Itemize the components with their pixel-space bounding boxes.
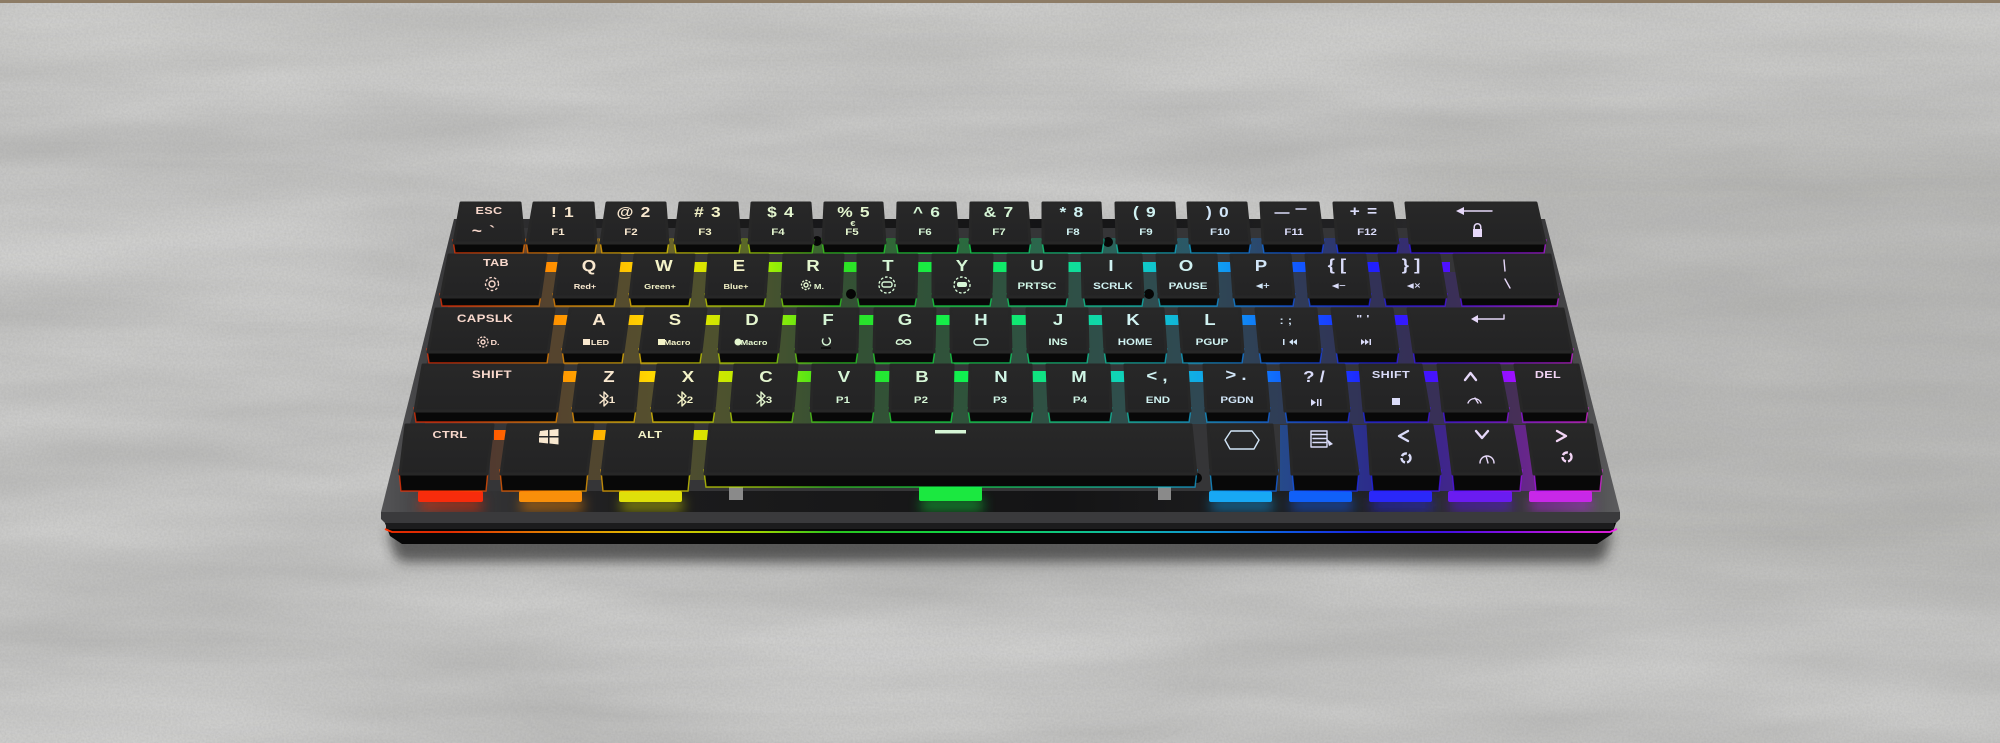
key K: HOME xyxy=(1118,337,1152,348)
key 7 xyxy=(969,203,1031,253)
key slash xyxy=(1281,365,1350,422)
key L xyxy=(1179,309,1244,363)
key G: G xyxy=(898,311,912,329)
key Z: 1 xyxy=(609,395,615,406)
key E: E xyxy=(733,257,745,275)
key right bracket: } ] xyxy=(1402,256,1420,274)
key E xyxy=(705,255,768,306)
key E: Blue+ xyxy=(723,282,749,291)
key P xyxy=(1231,255,1295,306)
key U xyxy=(1007,255,1068,306)
key H: H xyxy=(974,311,988,329)
key 2: @ 2 xyxy=(616,205,652,221)
key 5 xyxy=(822,203,886,253)
key left SHIFT xyxy=(414,365,563,422)
key left arrow xyxy=(1368,425,1441,491)
key period: PGDN xyxy=(1220,395,1254,406)
key U: PRTSC xyxy=(1017,281,1057,292)
key 2: F2 xyxy=(624,227,638,238)
keyboard front edge with LED strip xyxy=(381,512,1620,544)
key right bracket xyxy=(1379,255,1447,306)
key X xyxy=(651,365,718,422)
key ALT: ALT xyxy=(638,430,662,441)
key 9: ( 9 xyxy=(1133,205,1157,221)
keys: row 5 xyxy=(399,425,1602,491)
key D: Macro xyxy=(741,338,767,347)
key Z xyxy=(572,365,639,422)
key 4 xyxy=(748,203,814,253)
key 9: F9 xyxy=(1139,227,1153,238)
key Q: Q xyxy=(582,257,596,275)
key Z: Z xyxy=(603,368,615,386)
key I: SCRLK xyxy=(1093,281,1133,292)
key 3 xyxy=(674,203,741,253)
key 6: F6 xyxy=(918,227,932,238)
key Y: Y xyxy=(956,257,969,275)
key L: PGUP xyxy=(1196,337,1228,348)
key O xyxy=(1157,255,1219,306)
key L: L xyxy=(1204,311,1216,329)
key Y xyxy=(932,255,992,306)
key 0: F10 xyxy=(1210,227,1230,238)
key comma: < , xyxy=(1146,367,1168,385)
key right SHIFT xyxy=(1360,365,1430,422)
key comma xyxy=(1125,365,1191,422)
key P: P xyxy=(1255,257,1267,275)
key N xyxy=(968,365,1033,422)
key enter xyxy=(1408,309,1573,363)
key minus: F11 xyxy=(1284,227,1304,238)
keys: row 2 xyxy=(440,255,1559,306)
key quote xyxy=(1332,309,1399,363)
key down arrow xyxy=(1447,425,1522,491)
key O: PAUSE xyxy=(1169,281,1207,292)
key period xyxy=(1204,365,1270,422)
key 7: & 7 xyxy=(984,205,1014,221)
key CAPSLK: CAPSLK xyxy=(457,312,513,325)
key R xyxy=(781,255,843,306)
key up xyxy=(1438,365,1509,422)
key A: LED xyxy=(591,338,609,347)
key K xyxy=(1103,309,1167,363)
key menu xyxy=(1289,425,1359,491)
key D: D xyxy=(745,311,759,329)
key A xyxy=(562,309,629,363)
key ALT xyxy=(601,425,693,491)
key 1: F1 xyxy=(551,227,565,238)
key DEL xyxy=(1515,365,1588,422)
key X: X xyxy=(682,368,695,386)
key D xyxy=(718,309,782,363)
key DEL: DEL xyxy=(1535,370,1561,381)
key 4: F4 xyxy=(771,227,785,238)
key 5: € xyxy=(850,219,856,228)
key Cooler Master logo xyxy=(1208,425,1278,491)
key semicolon: : ; xyxy=(1280,316,1292,327)
keys: row 4 xyxy=(414,365,1588,422)
key 6 xyxy=(896,203,959,253)
key V: V xyxy=(838,368,851,386)
key equals xyxy=(1334,203,1399,253)
key P: ◀+ xyxy=(1256,281,1270,290)
key TAB: TAB xyxy=(483,258,509,269)
key M xyxy=(1047,365,1112,422)
key CTRL: CTRL xyxy=(433,430,467,441)
key quote: " ' xyxy=(1356,314,1370,325)
key left bracket xyxy=(1306,255,1371,306)
key 6: ^ 6 xyxy=(913,205,941,221)
key K: K xyxy=(1126,311,1140,329)
key 9 xyxy=(1116,203,1177,253)
key S: S xyxy=(669,311,681,329)
key H xyxy=(950,309,1012,363)
key right SHIFT: SHIFT xyxy=(1372,370,1410,381)
key J: INS xyxy=(1048,337,1068,348)
key comma: END xyxy=(1146,395,1170,406)
key 0 xyxy=(1188,203,1251,253)
key C: C xyxy=(759,368,773,386)
key X: 2 xyxy=(687,395,693,406)
keys: row 3 xyxy=(427,309,1573,363)
key space bar xyxy=(704,425,1197,487)
key backspace xyxy=(1406,203,1546,253)
key T xyxy=(857,255,917,306)
key ESC: ESC xyxy=(475,206,503,217)
key 1: ! 1 xyxy=(551,205,575,221)
key 8 xyxy=(1042,203,1104,253)
key F xyxy=(795,309,858,363)
space bar stabilisers xyxy=(729,487,1171,500)
key B: P2 xyxy=(914,395,928,406)
key slash: ? / xyxy=(1303,368,1325,386)
rainbow underglow xyxy=(425,238,1585,491)
key T: T xyxy=(882,257,894,275)
key Windows xyxy=(500,425,593,491)
key right arrow xyxy=(1527,425,1602,491)
key 2 xyxy=(600,203,669,253)
key 5: F5 xyxy=(845,227,859,238)
key equals: F12 xyxy=(1357,227,1377,238)
key V: P1 xyxy=(836,395,850,406)
key 8: * 8 xyxy=(1060,205,1084,221)
key CAPSLK xyxy=(427,309,554,363)
key R: M. xyxy=(814,282,824,291)
key B xyxy=(889,365,953,422)
key N: P3 xyxy=(993,395,1007,406)
key Q xyxy=(553,255,620,306)
key left SHIFT: SHIFT xyxy=(472,368,512,381)
keys: row 1 xyxy=(453,203,1546,253)
key O: O xyxy=(1179,257,1193,275)
key 5: % 5 xyxy=(837,205,871,221)
key 3: F3 xyxy=(698,227,712,238)
key semicolon xyxy=(1256,309,1322,363)
key W xyxy=(629,255,694,306)
key V xyxy=(810,365,874,422)
key I xyxy=(1082,255,1144,306)
key CAPSLK: D. xyxy=(490,338,500,347)
key equals: + = xyxy=(1350,204,1378,220)
key 4: $ 4 xyxy=(767,205,795,221)
key I: I xyxy=(1108,257,1114,275)
key U: U xyxy=(1030,257,1044,275)
key B: B xyxy=(915,368,929,386)
key A: A xyxy=(592,311,606,329)
key minus xyxy=(1261,203,1324,253)
key C xyxy=(730,365,797,422)
key 1 xyxy=(526,203,597,253)
key backslash xyxy=(1454,255,1559,306)
key J: J xyxy=(1053,311,1063,329)
key period: > . xyxy=(1225,366,1247,384)
key W: Green+ xyxy=(644,282,676,291)
key J xyxy=(1027,309,1089,363)
key ESC: ~ ` xyxy=(472,224,496,240)
key left bracket: { [ xyxy=(1328,256,1347,274)
key N: N xyxy=(994,368,1008,386)
keyboard drop shadow xyxy=(388,530,1612,562)
key left bracket: ◀− xyxy=(1332,281,1346,290)
key W: W xyxy=(655,257,674,275)
keyboard base plate xyxy=(381,219,1620,519)
key M: M xyxy=(1071,368,1087,386)
key M: P4 xyxy=(1073,395,1087,406)
key 8: F8 xyxy=(1066,227,1080,238)
key TAB xyxy=(440,255,546,306)
key G xyxy=(873,309,935,363)
key C: 3 xyxy=(766,395,772,406)
key R: R xyxy=(806,257,820,275)
key F: F xyxy=(822,311,834,329)
key Q: Red+ xyxy=(574,282,596,291)
key S: Macro xyxy=(664,338,690,347)
key 0: ) 0 xyxy=(1206,205,1230,221)
key right bracket: ◀× xyxy=(1407,281,1421,290)
lit switches row xyxy=(418,486,1592,512)
key S xyxy=(639,309,706,363)
key ESC xyxy=(453,203,525,253)
key 7: F7 xyxy=(992,227,1006,238)
key CTRL xyxy=(399,425,493,491)
key 3: # 3 xyxy=(694,205,722,221)
